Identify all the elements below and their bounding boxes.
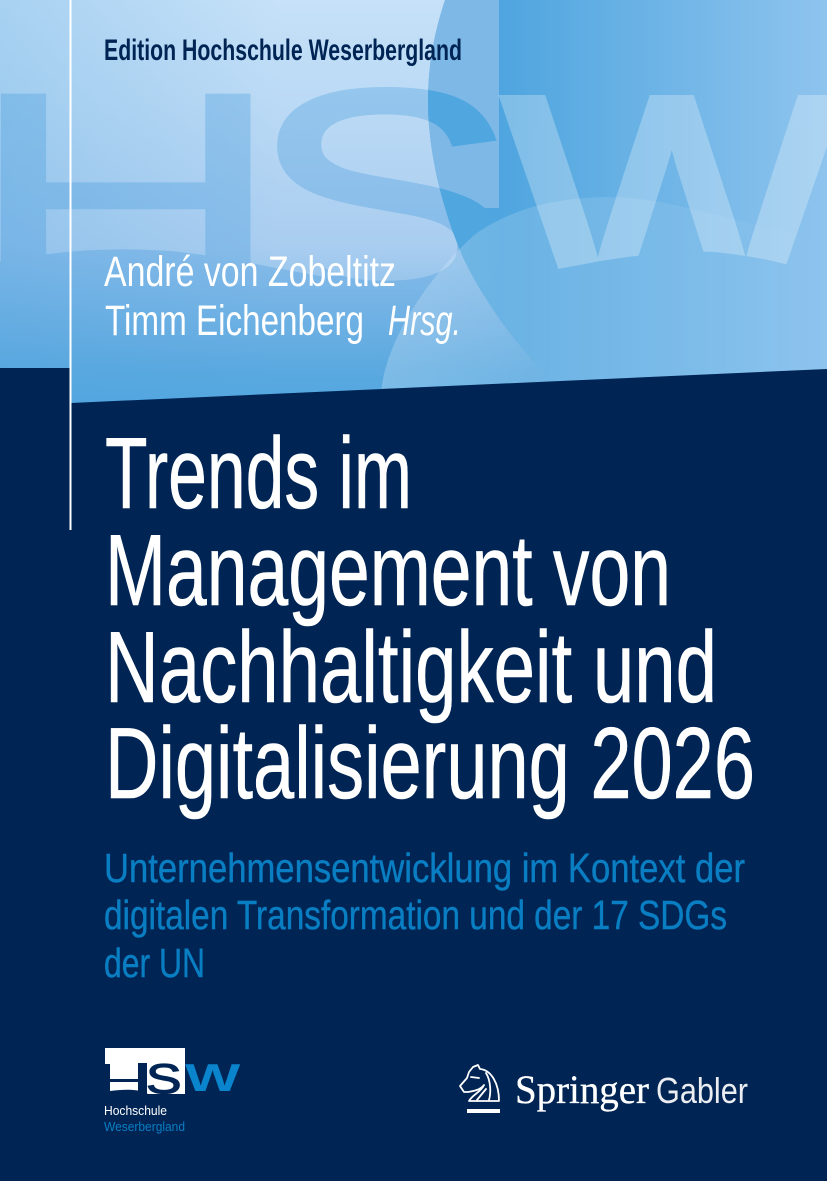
white vertical rule xyxy=(70,0,72,530)
subtitle: der UN xyxy=(104,940,205,986)
series title: Edition Hochschule Weserbergland xyxy=(104,34,462,67)
editors: Hrsg. xyxy=(388,297,461,345)
editors: Timm Eichenberg xyxy=(105,297,364,345)
watermark letters H and S on light area: S xyxy=(250,28,517,368)
main title xyxy=(105,418,755,820)
HSW logo: Hochschule xyxy=(104,1103,167,1118)
HSW logo: S xyxy=(146,1056,182,1103)
publisher wordmark: Gabler xyxy=(656,1070,748,1111)
watermark letters H and S on light area xyxy=(0,87,552,403)
HSW logo: Weserbergland xyxy=(104,1119,185,1134)
lighter curved shape xyxy=(381,197,827,395)
HSW logo xyxy=(104,1048,240,1134)
right blue panel xyxy=(428,0,827,381)
light blue background xyxy=(0,0,827,410)
publisher wordmark: Springer xyxy=(515,1067,649,1112)
subtitle xyxy=(104,845,745,986)
icon: Springer chess knight xyxy=(460,1065,500,1113)
editors: André von Zobeltitz xyxy=(104,248,396,296)
left shading of background xyxy=(0,0,280,410)
publisher wordmark xyxy=(515,1067,748,1112)
editors xyxy=(104,248,461,345)
HSW logo: W xyxy=(185,1056,240,1100)
main title: Trends im xyxy=(105,418,412,530)
right blue panel: S xyxy=(250,28,517,368)
navy lower block xyxy=(0,368,827,1181)
